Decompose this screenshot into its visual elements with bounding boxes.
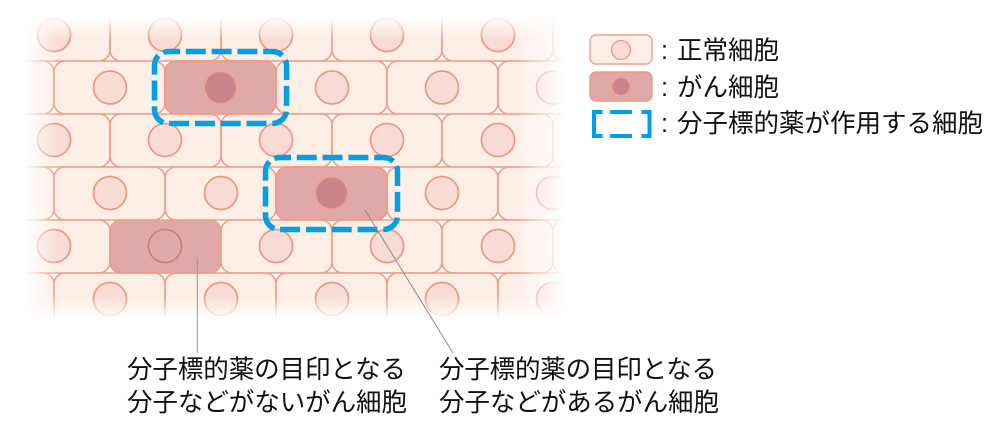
leader line: cell without target	[196, 258, 198, 353]
legend: cancer cell icon	[590, 72, 652, 101]
cell row 4	[0, 167, 609, 220]
cell row 1	[0, 0, 664, 61]
legend	[590, 35, 983, 138]
edge fade	[0, 0, 670, 385]
panel: cell tissue diagram	[0, 0, 670, 385]
leader line: cell with target	[365, 210, 453, 353]
legend: normal cell label: 正常細胞	[677, 37, 779, 65]
cell row 3	[0, 114, 664, 167]
legend: normal cell icon	[590, 35, 652, 64]
cell row 6	[0, 273, 609, 373]
dashed target box, upper	[154, 52, 286, 124]
legend: dashed box icon	[594, 112, 650, 136]
cancer cell with target, upper	[165, 61, 276, 114]
caption: cell with target: 分子などがあるがん細胞	[439, 389, 719, 417]
caption: cell without target: 分子などがないがん細胞	[127, 389, 407, 417]
caption: cell without target: 分子標的薬の目印となる	[127, 356, 406, 384]
legend: normal cell label: :	[661, 37, 668, 65]
cell row 5	[0, 220, 664, 273]
cancer cell with target, lower	[276, 167, 387, 220]
cancer cell without target	[110, 220, 221, 273]
legend: cancer cell label: :	[661, 74, 668, 102]
caption: cell with target: 分子標的薬の目印となる	[439, 356, 717, 384]
legend: cancer cell label: がん細胞	[677, 74, 779, 102]
dashed target box, lower	[266, 158, 398, 230]
legend: target label: 分子標的薬が作用する細胞	[677, 110, 983, 138]
cell row 2	[0, 61, 609, 114]
legend: target label: :	[661, 110, 668, 138]
